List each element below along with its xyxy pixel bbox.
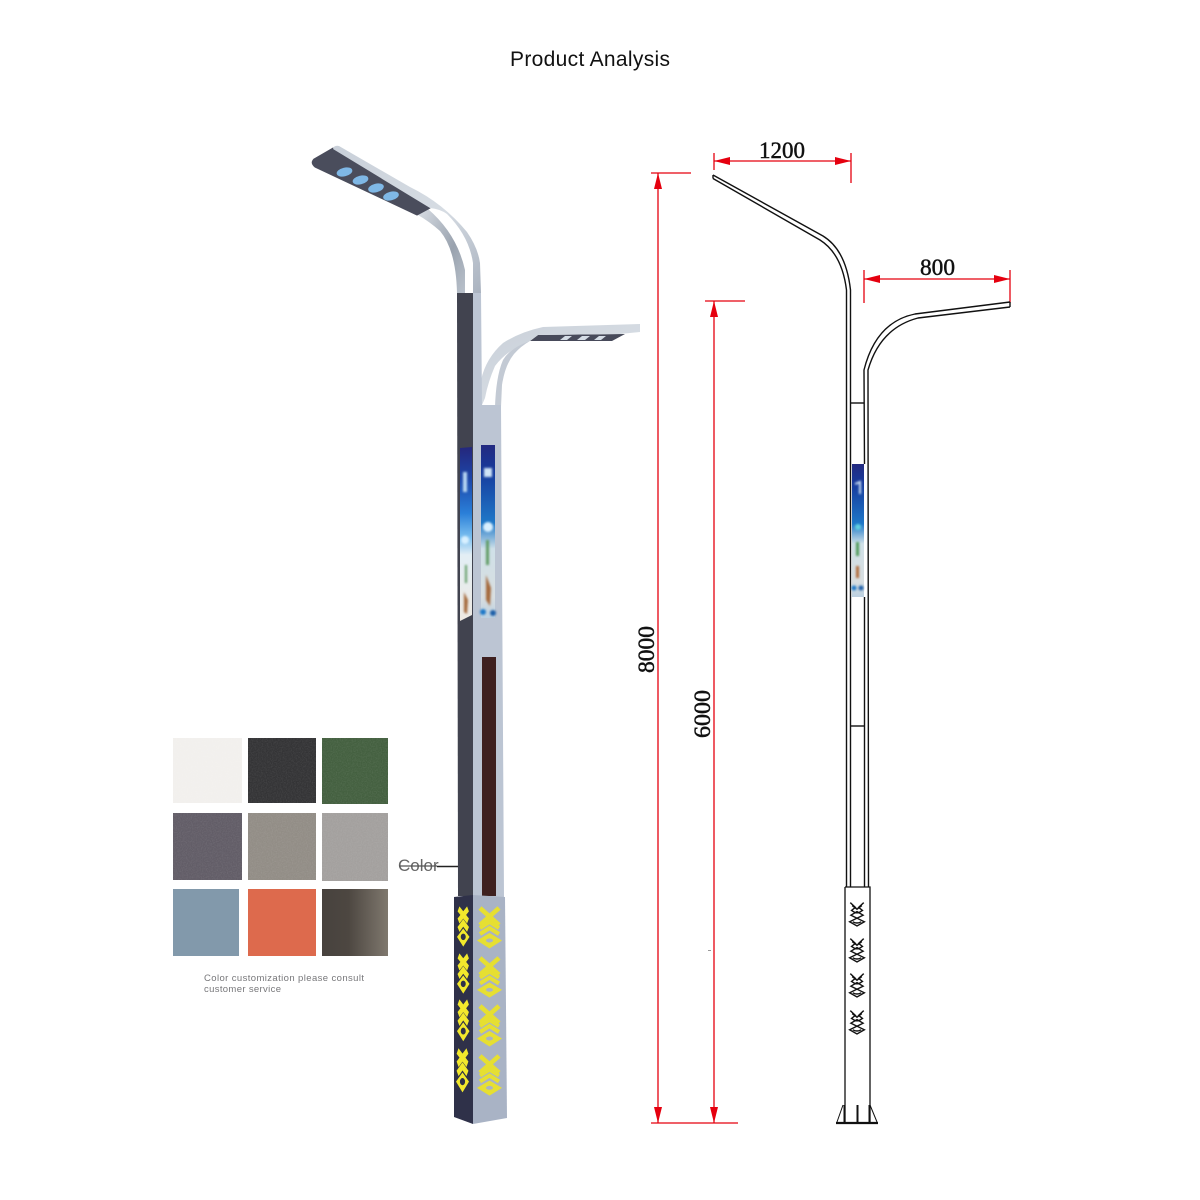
right video screen xyxy=(480,445,496,618)
swatch caption: Color customization please consult xyxy=(204,973,364,984)
swatch: orange red xyxy=(248,889,316,956)
swatch: steel blue xyxy=(173,889,239,956)
dimension: 8000 height: 8000 xyxy=(634,626,659,673)
upper arm top band xyxy=(333,146,481,293)
dimension: 1200 arm xyxy=(714,138,851,183)
yellow motifs: dark face xyxy=(456,909,470,1092)
swatch: bronze xyxy=(322,889,388,956)
motif 4 xyxy=(456,1051,469,1092)
motif 4 xyxy=(477,1056,502,1096)
left video screen xyxy=(460,447,472,621)
swatch: charcoal xyxy=(248,738,316,803)
swatch: purple grey xyxy=(173,813,242,880)
pole base dark face xyxy=(454,895,473,1124)
upper lamp head xyxy=(312,148,430,215)
drawing: screen xyxy=(852,464,864,597)
swatch: light grey xyxy=(322,813,388,881)
brown door panel xyxy=(482,657,496,896)
drawing motif 3 xyxy=(850,974,864,997)
lower lamp LEDs xyxy=(560,336,606,340)
callout: color label xyxy=(398,856,458,875)
upper lamp LEDs xyxy=(336,166,400,202)
dimension: 1200 arm: 1200 xyxy=(759,138,805,163)
drawing motif 4 xyxy=(850,1011,864,1034)
drawing: motifs xyxy=(850,903,864,1034)
swatch: warm grey xyxy=(248,813,316,880)
yellow motifs: light face xyxy=(477,908,502,1096)
motif 1 xyxy=(457,909,470,947)
motif 1 xyxy=(477,908,502,948)
swatch caption second line: customer service xyxy=(204,984,281,995)
panel: rendered lamp pole xyxy=(312,146,640,1124)
dimension: 8000 height xyxy=(634,173,738,1123)
light shaft strip and face xyxy=(473,293,504,897)
lower lamp arm xyxy=(481,324,640,407)
dimension: 800 arm xyxy=(864,255,1010,303)
motif 3 xyxy=(457,1002,470,1041)
swatch: green xyxy=(322,738,388,804)
motif 2 xyxy=(477,958,502,998)
swatch: white xyxy=(173,738,242,803)
callout: color label: Color xyxy=(398,856,439,875)
pole base light face xyxy=(473,895,507,1124)
dimension: 6000 height: 6000 xyxy=(690,690,715,738)
lower arm second band xyxy=(495,341,530,407)
drawing motif 2 xyxy=(850,939,864,962)
drawing: base section xyxy=(845,887,870,1123)
dimension: 800 arm: 800 xyxy=(920,255,955,280)
drawing: base flange xyxy=(836,1105,878,1123)
lower lamp head xyxy=(530,334,625,341)
upper lamp arm xyxy=(312,146,481,293)
panel: colour swatches xyxy=(173,738,388,956)
swatch grain texture xyxy=(173,738,388,881)
motif 2 xyxy=(457,956,470,994)
drawing: poles and arms xyxy=(713,175,1010,887)
dark shaft face xyxy=(457,293,473,896)
lower arm top band xyxy=(481,324,640,405)
dimension: 6000 height xyxy=(690,301,745,1123)
drawing motif 1 xyxy=(850,903,864,926)
small stray mark xyxy=(708,950,711,951)
upper arm lower band xyxy=(418,209,465,293)
panel: technical line drawing xyxy=(713,175,1010,1123)
motif 3 xyxy=(477,1006,502,1046)
title: Product Analysis xyxy=(510,48,670,71)
